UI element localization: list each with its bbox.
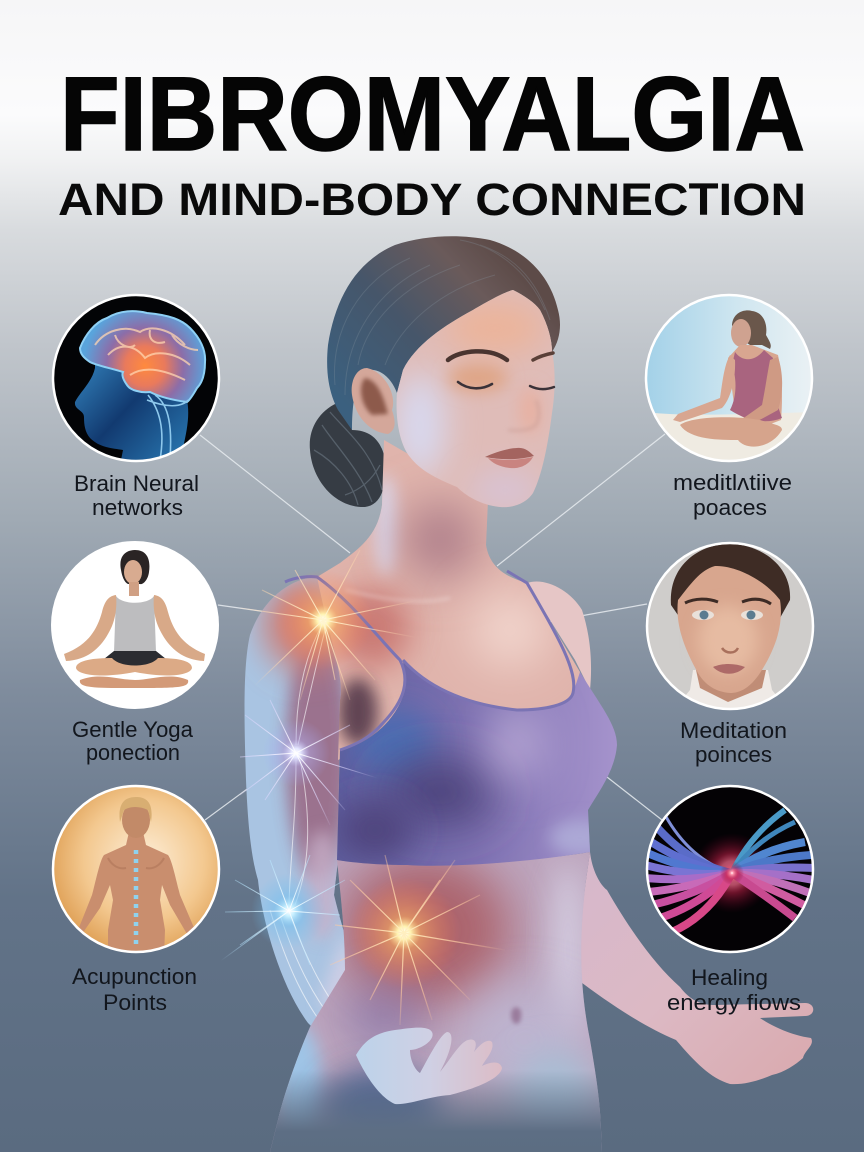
neck and collar xyxy=(686,670,775,708)
acupuncture figure xyxy=(78,832,195,958)
central figure xyxy=(215,236,813,1152)
label: brain xyxy=(74,471,199,520)
label: acupuncture: Acupunction xyxy=(72,964,197,989)
lips xyxy=(485,448,534,468)
hair bun xyxy=(310,403,385,507)
label: yoga: Gentle Yoga xyxy=(72,717,194,742)
label: meditative poses: meditlʌtiive xyxy=(673,470,792,495)
panel: brain neural networks xyxy=(53,295,219,465)
hair xyxy=(671,544,790,618)
nose xyxy=(508,400,539,431)
glow: wrist xyxy=(215,855,345,965)
glow: arm xyxy=(240,700,400,825)
subtitle: AND MIND-BODY CONNECTION xyxy=(58,174,806,225)
label: healing energy xyxy=(667,965,801,1015)
label: meditative poses xyxy=(673,470,792,520)
title: FIBROMYALGIA xyxy=(60,56,805,173)
label: brain: networks xyxy=(92,495,183,520)
label: healing energy: Healing xyxy=(691,965,768,990)
brainstem xyxy=(147,395,188,460)
glow: shoulder xyxy=(240,550,430,700)
panel: acupuncture xyxy=(52,785,220,958)
panel: healing energy xyxy=(645,786,814,952)
label: acupuncture: Points xyxy=(103,990,167,1015)
label: healing energy: energy fiows xyxy=(667,990,801,1015)
label: meditation: Meditation xyxy=(680,718,787,743)
face xyxy=(394,290,555,508)
acupuncture points xyxy=(134,850,138,945)
label: meditation xyxy=(680,718,787,767)
panel: gentle yoga xyxy=(51,541,219,709)
label: meditation: poinces xyxy=(695,742,772,767)
label: yoga: ponection xyxy=(86,740,180,765)
hair xyxy=(327,236,560,430)
left hand xyxy=(356,1028,502,1104)
meditating woman xyxy=(673,310,782,447)
energy flows right xyxy=(732,810,814,918)
label: yoga xyxy=(72,717,194,765)
energy flows left xyxy=(645,815,732,932)
crop top xyxy=(285,571,617,866)
connector lines xyxy=(200,434,665,820)
label: acupuncture xyxy=(72,964,197,1015)
blanket xyxy=(655,412,803,460)
central glow xyxy=(700,836,761,910)
right shoulder xyxy=(527,582,591,690)
closed eyes and brows xyxy=(448,351,554,389)
lower body xyxy=(260,852,610,1152)
yoga figure xyxy=(120,550,149,584)
left arm xyxy=(244,578,345,1026)
ear xyxy=(352,368,395,434)
label: meditative poses: poaces xyxy=(693,495,767,520)
panel: meditative poses xyxy=(645,295,815,470)
label: brain: Brain Neural xyxy=(74,471,199,496)
head silhouette xyxy=(74,365,188,460)
glow: abdomen xyxy=(330,855,505,1025)
neck and chest xyxy=(317,440,580,760)
face xyxy=(677,566,781,693)
brain xyxy=(80,311,205,402)
right arm xyxy=(578,852,813,1084)
panel: meditation face xyxy=(647,543,813,712)
